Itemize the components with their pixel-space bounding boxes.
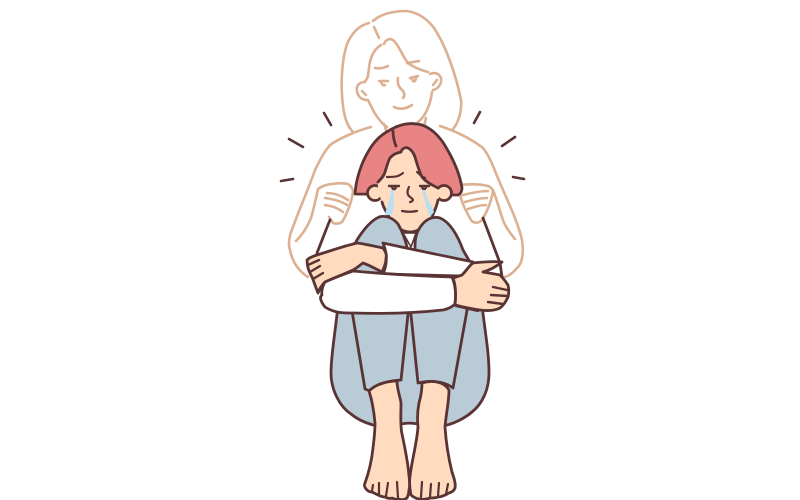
face outline (378, 148, 438, 232)
child face (378, 148, 439, 232)
upper sleeve (383, 243, 473, 276)
right shin (410, 305, 468, 388)
stress rays (281, 112, 524, 181)
tears (385, 190, 434, 217)
right knee (415, 217, 470, 262)
left hand and upper forearm (307, 243, 386, 293)
eyes, nose, mouth and brows (387, 172, 429, 212)
adult left arm and hand (289, 127, 371, 277)
child figure (307, 124, 509, 500)
right hand (453, 262, 509, 311)
child ears (368, 186, 452, 200)
left knee (352, 216, 407, 275)
child hair (355, 124, 462, 195)
shirt collar (403, 233, 416, 247)
left shin (351, 305, 409, 391)
hair parting (393, 131, 396, 146)
right foot (410, 381, 455, 499)
adult hair (342, 11, 461, 132)
left foot (364, 381, 410, 500)
gap between feet (401, 424, 418, 472)
adult figure outline (289, 11, 523, 277)
adult face (357, 39, 441, 130)
adult right arm and hand (440, 126, 523, 277)
outer pants (331, 305, 489, 425)
child torso lines (317, 218, 502, 277)
lower sleeve (321, 271, 456, 313)
